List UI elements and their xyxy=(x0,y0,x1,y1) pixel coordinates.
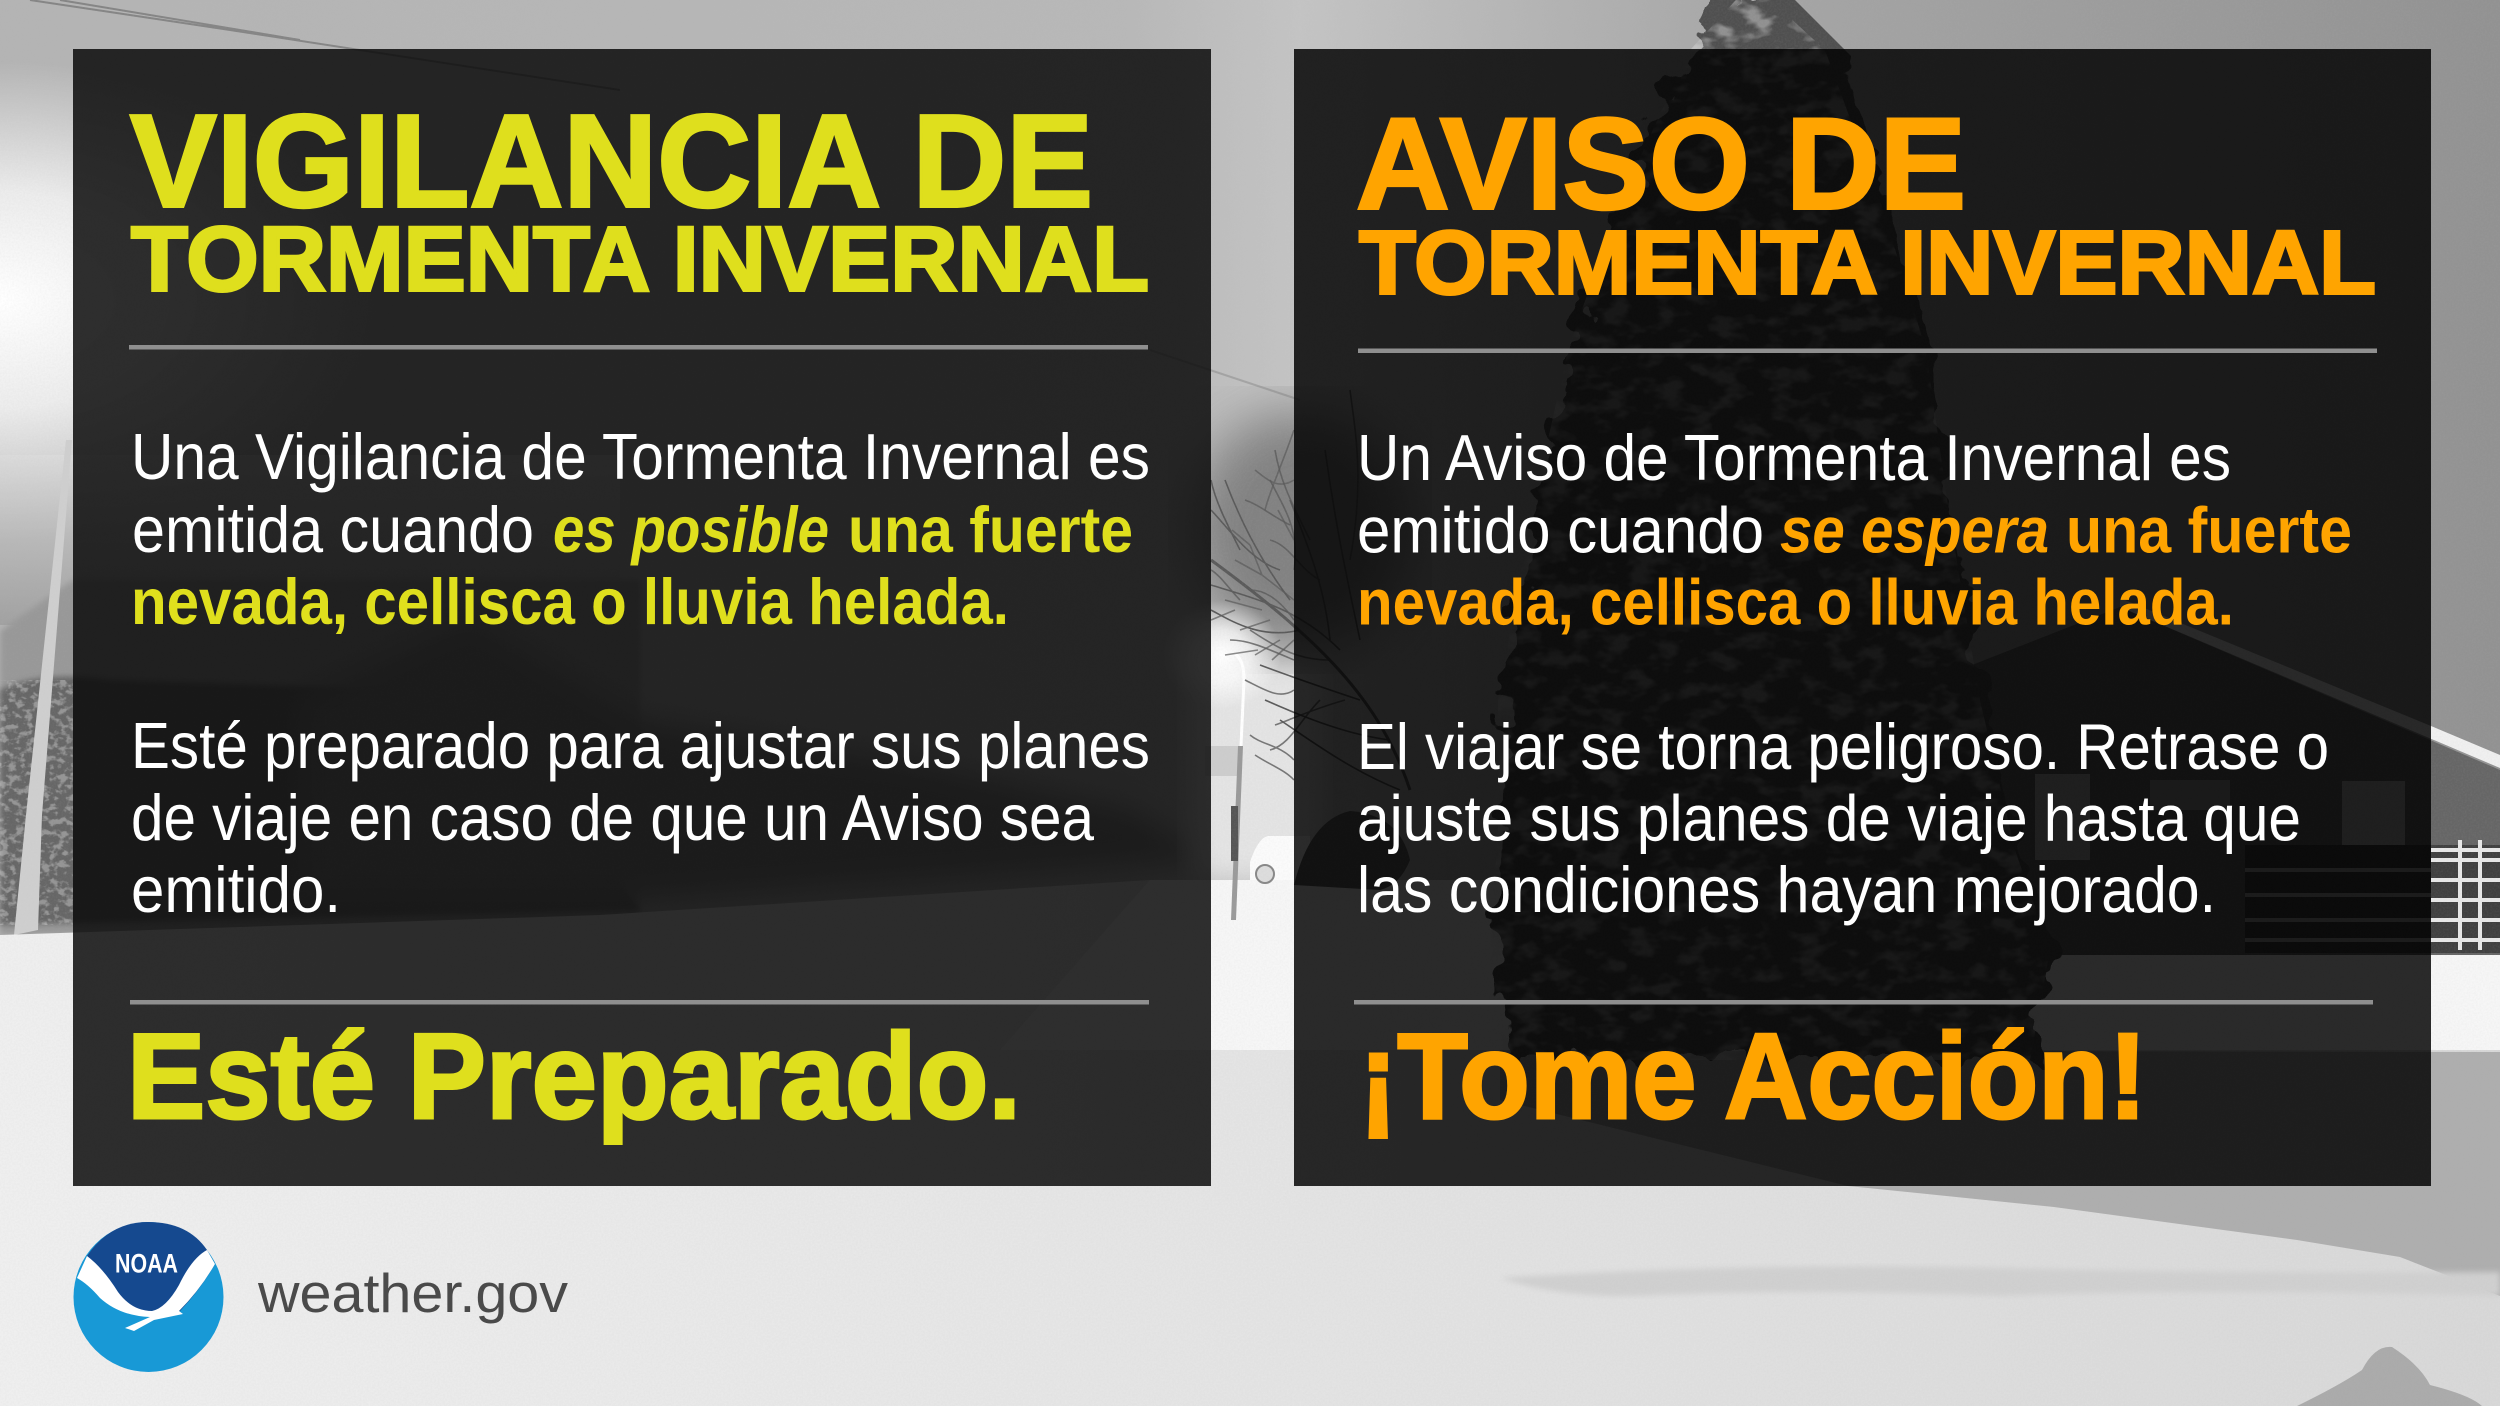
call to action: Tome Acción: ¡Tome Acción! xyxy=(1359,1008,2147,1144)
text block: watch advice: emitido. xyxy=(131,853,341,926)
text block: warning advice xyxy=(1357,710,2329,926)
snow shadow on the right xyxy=(1500,1050,2500,1296)
bare tree xyxy=(1211,390,1410,790)
plant at bottom right xyxy=(2297,1347,2482,1406)
haze glow at left xyxy=(0,60,380,540)
gutter haze xyxy=(1190,660,1320,880)
text block: watch definition: nevada, cellisca o lluvia helada. xyxy=(131,565,1009,638)
text block: watch definition: emitida cuando xyxy=(132,493,534,566)
heading: Aviso de Tormenta Invernal: AVISO DE xyxy=(1356,90,1966,236)
snow ground xyxy=(0,880,2500,1406)
website label: weather.gov xyxy=(257,1262,569,1324)
panel: winter storm warning xyxy=(1294,49,2431,1186)
conifer tree xyxy=(1495,0,2055,1060)
heading: Vigilancia de Tormenta Invernal: VIGILANCIA DE xyxy=(130,88,1093,234)
heading: Vigilancia de Tormenta Invernal xyxy=(130,88,1149,310)
text block: watch advice xyxy=(131,709,1150,926)
text block: warning definition: se espera xyxy=(1780,494,2049,566)
text block: warning definition: Un Aviso de Tormenta Invernal es xyxy=(1357,421,2231,494)
text block: watch advice: de viaje en caso de que un Aviso sea xyxy=(131,781,1095,854)
text block: warning advice: ajuste sus planes de viaje hasta que xyxy=(1357,782,2301,854)
icon: NOAA logo xyxy=(74,1222,224,1372)
call to action: Esté Preparado: Esté Preparado. xyxy=(127,1008,1021,1144)
house xyxy=(1926,607,2500,955)
heading: Vigilancia de Tormenta Invernal: TORMENTA INVERNAL xyxy=(131,208,1149,310)
text block: warning advice: El viajar se torna peligroso. Retrase o xyxy=(1357,710,2329,783)
text block: warning definition: emitido cuando xyxy=(1357,494,1764,566)
text block: warning definition xyxy=(1357,421,2352,638)
text block: watch definition: una fuerte xyxy=(848,493,1133,566)
heading: Aviso de Tormenta Invernal: TORMENTA INVERNAL xyxy=(1359,214,2376,314)
text block: watch definition: es posible xyxy=(553,493,829,566)
text block: warning definition: nevada, cellisca o lluvia helada. xyxy=(1357,566,2234,638)
text block: watch definition: Una Vigilancia de Tormenta Invernal es xyxy=(131,420,1150,493)
bush at left xyxy=(0,677,640,925)
distant street and houses under left panel xyxy=(300,620,1211,900)
heading: Aviso de Tormenta Invernal xyxy=(1356,90,2376,314)
text block: watch advice: Esté preparado para ajustar sus planes xyxy=(131,709,1150,782)
icon: NOAA logo: NOAA xyxy=(115,1248,178,1278)
text block: warning advice: las condiciones hayan mejorado. xyxy=(1357,853,2216,926)
text block: warning definition: una fuerte xyxy=(2066,494,2352,566)
left lamp pole xyxy=(14,440,72,935)
panel: winter storm watch xyxy=(73,49,1211,1186)
text block: watch definition xyxy=(131,420,1150,638)
glow and van in gutter xyxy=(1162,600,1282,710)
